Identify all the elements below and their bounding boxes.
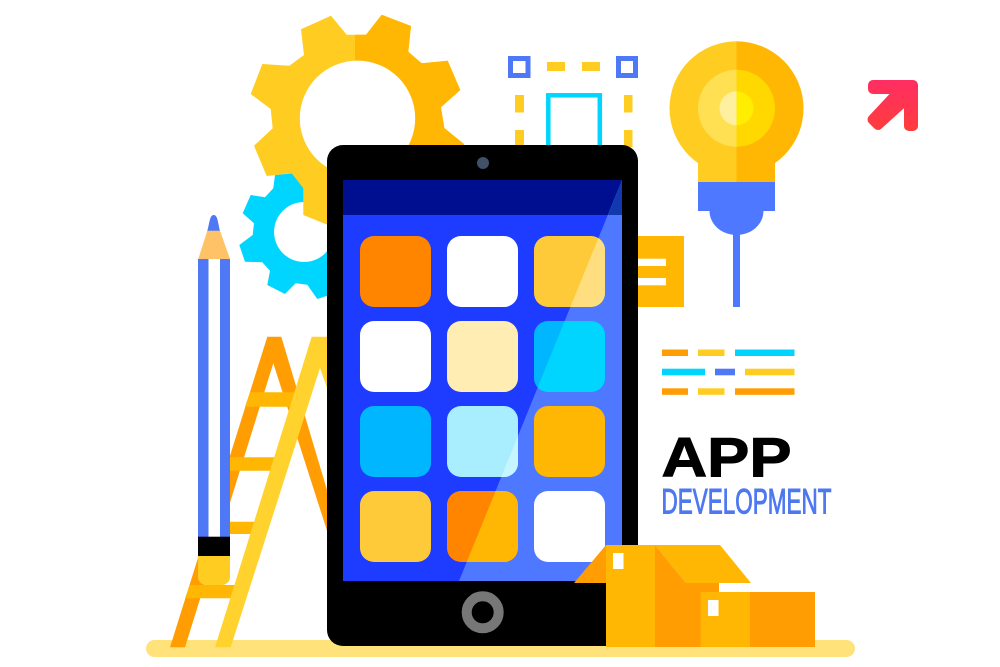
icon: large yellow gear: [251, 15, 464, 230]
camera: [477, 157, 489, 169]
app icons grid: [360, 236, 605, 562]
screen glare on icons: [466, 238, 605, 562]
panel: tablet device: [327, 145, 638, 646]
icon: red arrow: [872, 85, 913, 126]
floor strip: [146, 640, 855, 657]
icon: yellow note card: [630, 236, 684, 307]
icon: selection frame: [510, 58, 636, 151]
icon: small cyan gear: [239, 173, 345, 299]
icon: ladder: [170, 337, 330, 647]
home button: [467, 596, 499, 628]
subtitle: DEVELOPMENT: DEVELOPMENT: [662, 482, 832, 521]
icon: pencil: [198, 215, 230, 585]
decorative code lines: [662, 350, 794, 395]
icon: large open box: [574, 545, 751, 647]
icon: light bulb: [670, 41, 804, 307]
app development illustration: [146, 14, 918, 657]
screen: [343, 180, 622, 581]
title: APP: APP: [662, 426, 792, 488]
icon: small box: [701, 592, 815, 647]
